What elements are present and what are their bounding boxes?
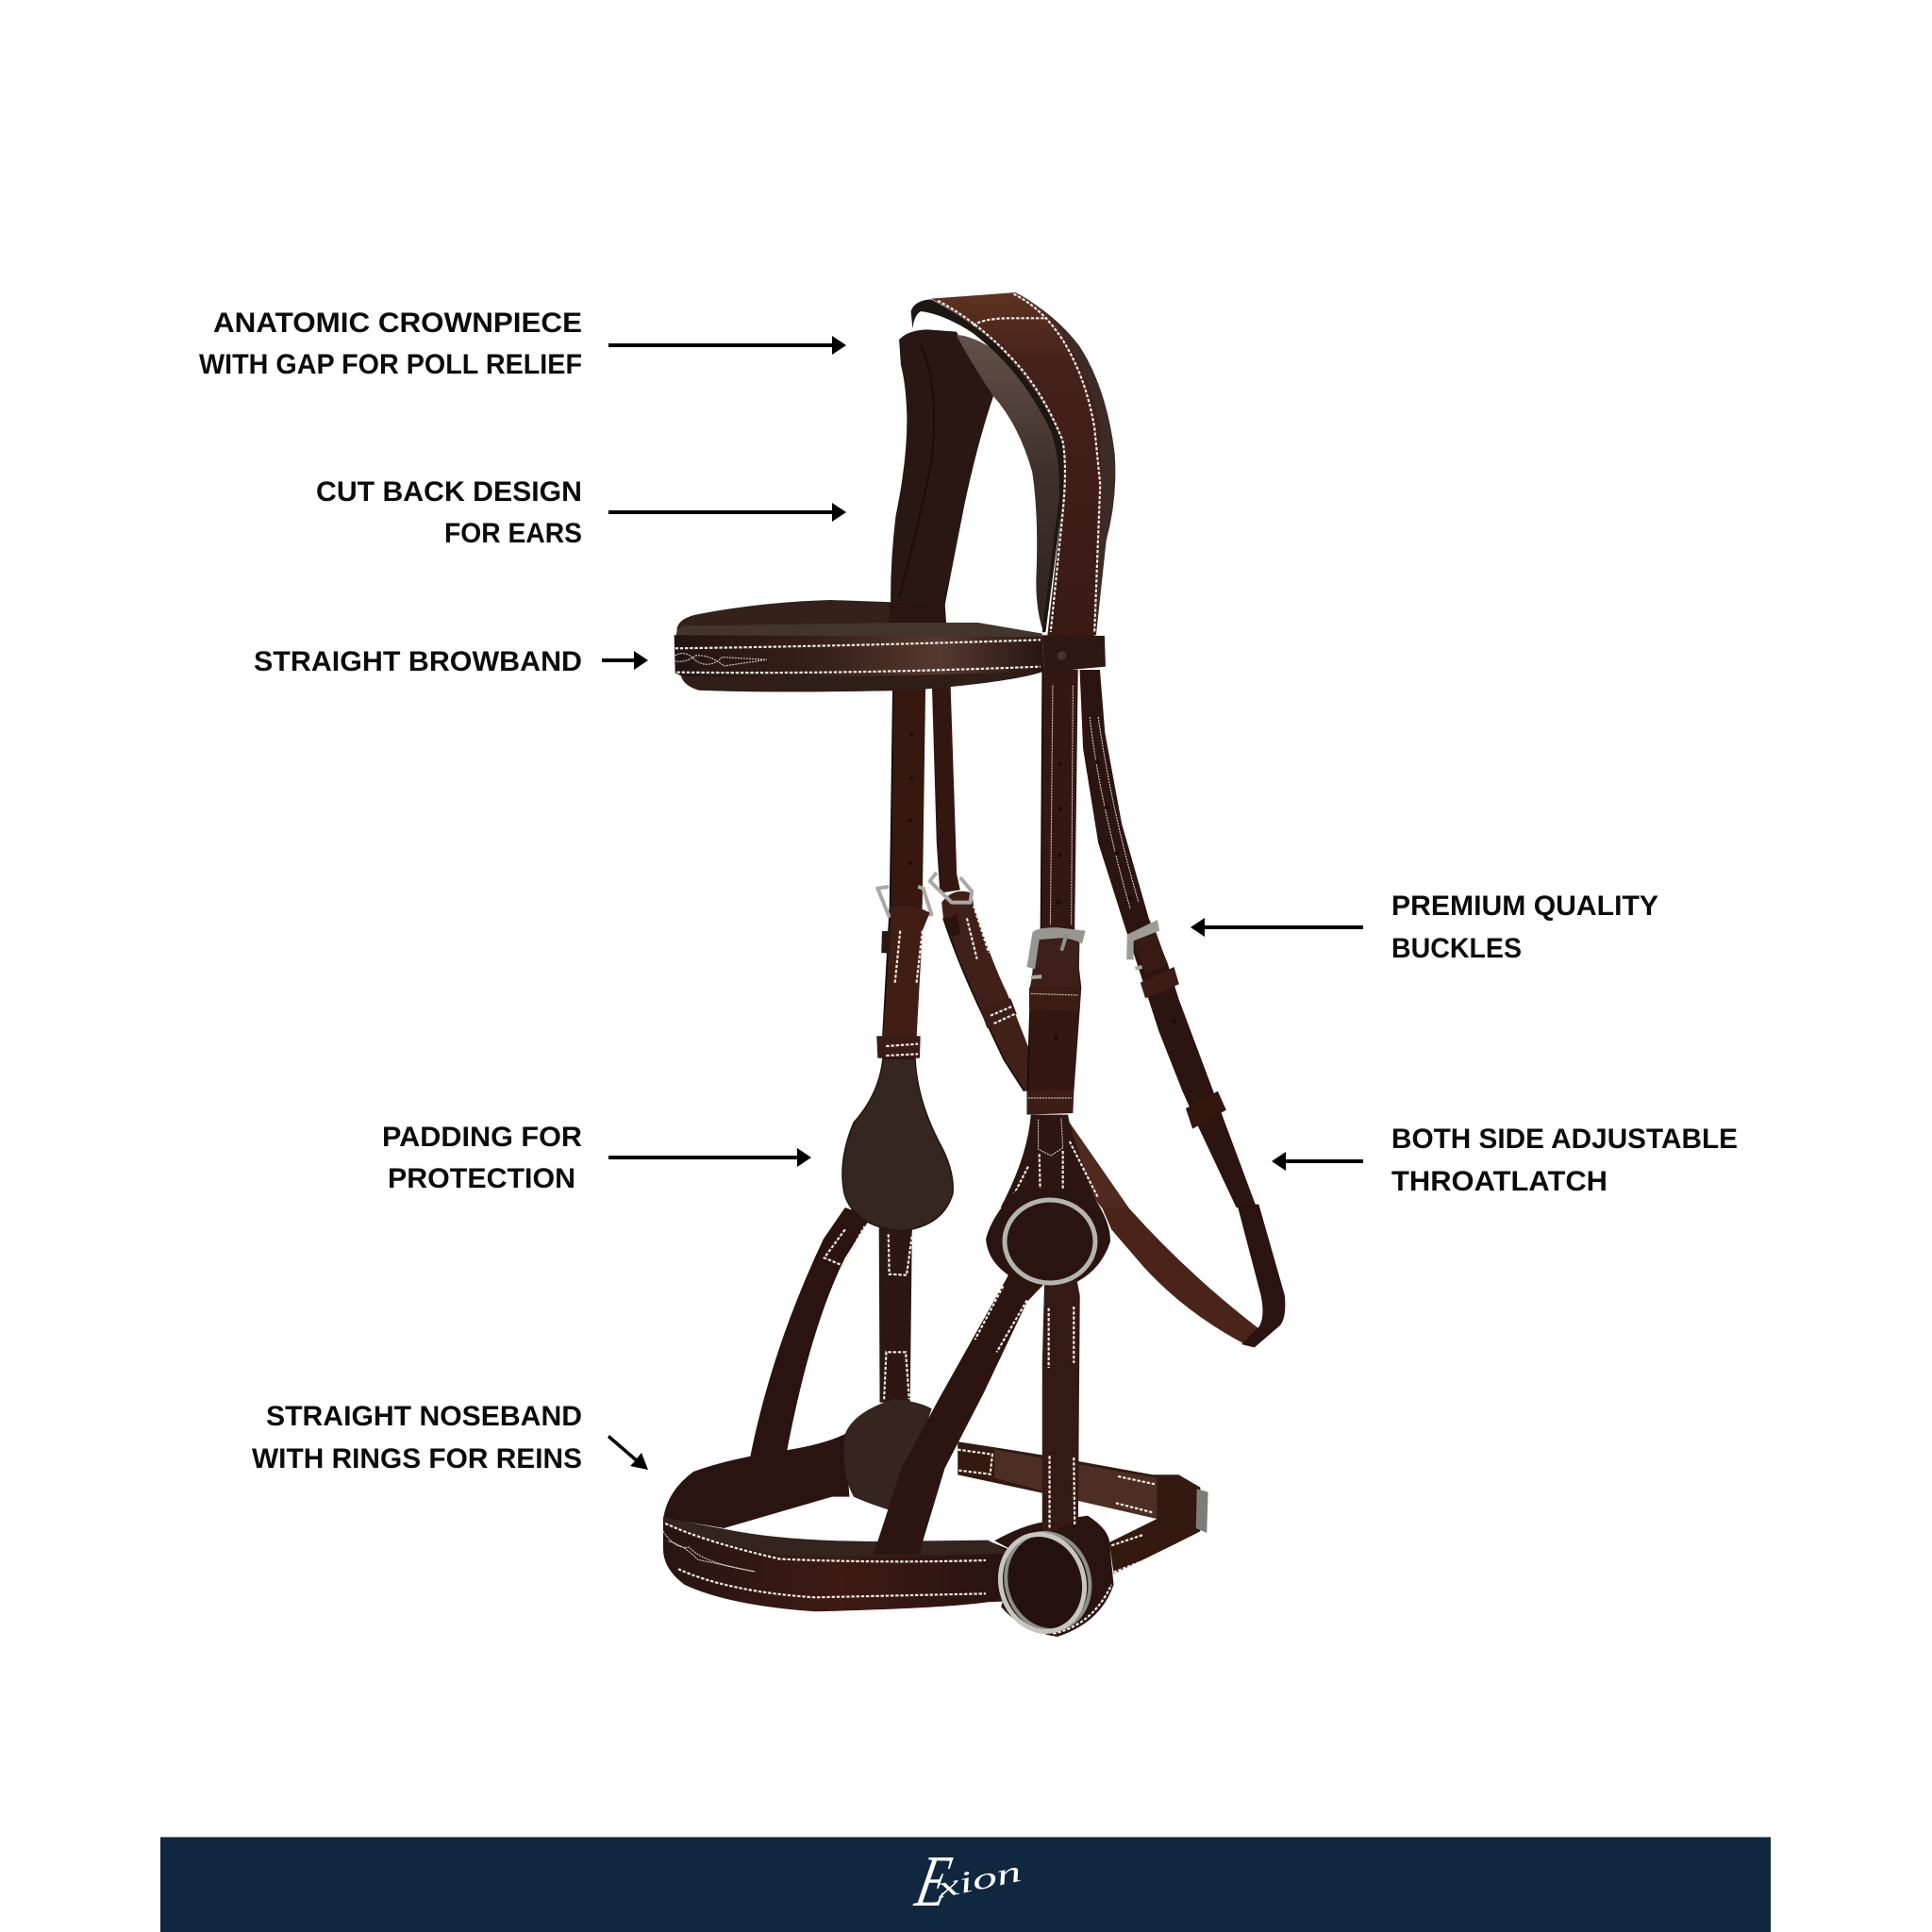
label: premium buckles: PREMIUM QUALITY bbox=[1391, 891, 1658, 922]
footer band bbox=[160, 1837, 1771, 1932]
nose pad lining bbox=[663, 1399, 932, 1528]
label: adjustable throatlatch bbox=[1391, 1124, 1738, 1197]
arrow: throatlatch bbox=[1272, 1152, 1363, 1171]
label: straight browband: STRAIGHT BROWBAND bbox=[254, 646, 582, 677]
vertical strap bbox=[1042, 1279, 1080, 1535]
label: straight noseband bbox=[252, 1401, 582, 1474]
ring tab bbox=[1001, 1115, 1098, 1208]
nose band bbox=[663, 1517, 1023, 1611]
arrow: crownpiece bbox=[608, 336, 846, 355]
label: cut back design bbox=[316, 476, 582, 549]
rings bbox=[990, 1200, 1101, 1641]
label: padding for protection: PROTECTION bbox=[388, 1163, 575, 1194]
label: anatomic crownpiece: ANATOMIC CROWNPIECE bbox=[213, 308, 582, 339]
arrow: cut back design bbox=[608, 503, 846, 522]
bottom ring leather bbox=[994, 1516, 1114, 1637]
padding teardrop bbox=[842, 1058, 953, 1231]
bridle photo illustration bbox=[663, 292, 1285, 1641]
crownpiece bbox=[891, 292, 1115, 637]
label: cut back design: CUT BACK DESIGN bbox=[316, 476, 582, 508]
arrow: padding bbox=[608, 1148, 811, 1167]
label: cut back design: FOR EARS bbox=[444, 518, 582, 549]
back noseband strap bbox=[956, 1441, 1208, 1574]
top ring bbox=[1005, 1200, 1095, 1283]
label: adjustable throatlatch: THROATLATCH bbox=[1391, 1166, 1607, 1197]
noseband and lower straps bbox=[663, 1189, 1285, 1637]
left cheek strap bbox=[876, 670, 931, 1058]
browband front bbox=[675, 623, 1106, 691]
label: padding for protection bbox=[382, 1122, 582, 1194]
throat band upper bbox=[1061, 1123, 1128, 1208]
curved cheek strap bbox=[750, 1208, 871, 1459]
logo: xion bbox=[932, 1854, 1024, 1905]
label: anatomic crownpiece: WITH GAP FOR POLL RELIEF bbox=[199, 349, 582, 380]
browband back bbox=[676, 599, 946, 635]
label: premium buckles: BUCKLES bbox=[1391, 933, 1522, 964]
label: premium buckles bbox=[1391, 891, 1658, 964]
bottom ring bbox=[990, 1524, 1101, 1641]
diagonal strap bbox=[874, 1259, 1046, 1555]
arrow: noseband bbox=[608, 1435, 648, 1470]
logo: E bbox=[908, 1840, 958, 1922]
label: straight noseband: WITH RINGS FOR REINS bbox=[252, 1443, 582, 1474]
throatlatch loop bbox=[1102, 1205, 1285, 1347]
label: straight noseband: STRAIGHT NOSEBAND bbox=[266, 1401, 582, 1432]
label: anatomic crownpiece bbox=[199, 308, 582, 380]
second strap with buckle bbox=[930, 670, 1031, 1091]
arrow: straight browband bbox=[602, 651, 648, 670]
label: padding for protection: PADDING FOR bbox=[382, 1122, 582, 1153]
logo bbox=[908, 1840, 1024, 1922]
top ring leather bbox=[986, 1189, 1110, 1283]
throatlatch strap bbox=[1080, 670, 1257, 1208]
arrow: buckles bbox=[1191, 918, 1363, 937]
central strap with buckle bbox=[1026, 670, 1086, 1115]
label: adjustable throatlatch: BOTH SIDE ADJUSTABLE bbox=[1391, 1124, 1738, 1155]
center strap bbox=[879, 1214, 912, 1403]
cheek and throat straps bbox=[876, 670, 1257, 1208]
